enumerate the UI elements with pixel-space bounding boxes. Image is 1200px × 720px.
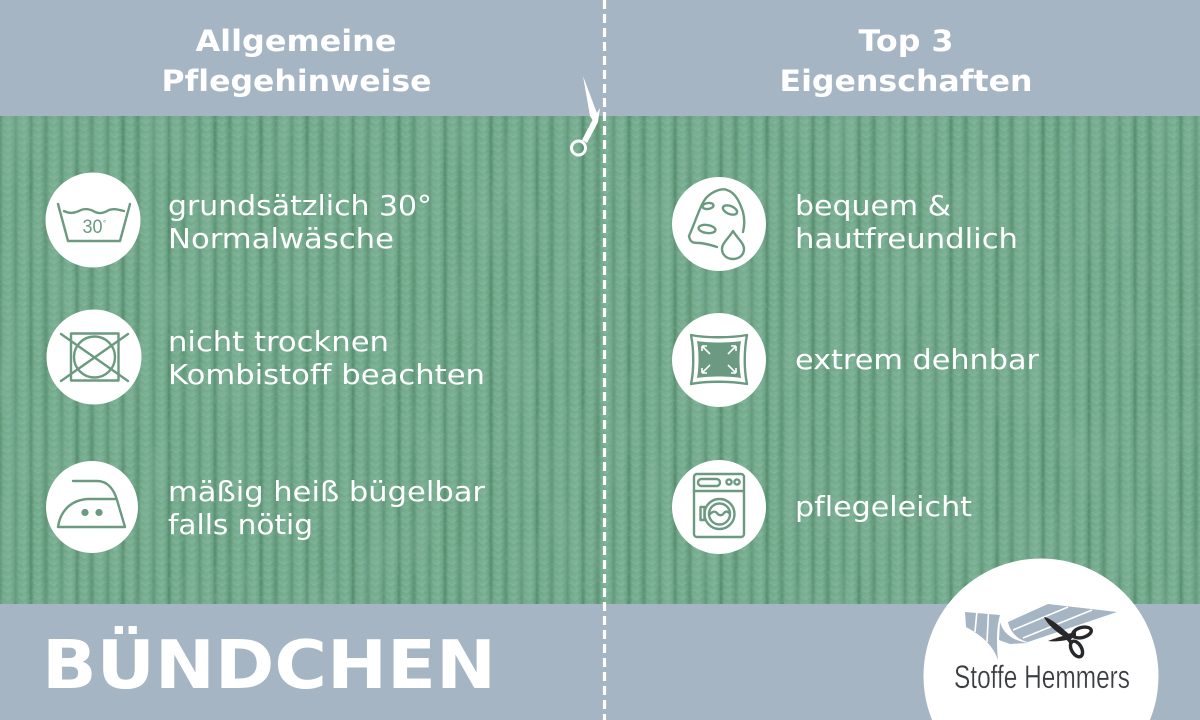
- text: ironing instructions: mäßig heiß bügelbar: [168, 475, 486, 508]
- text: wash instructions: Normalwäsche: [168, 222, 394, 255]
- top header band: [0, 0, 1200, 116]
- icon: wash 30 degrees: °: [103, 219, 106, 228]
- title: Bündchen: BÜNDCHEN: [42, 625, 496, 704]
- text: easy care: pflegeleicht: [795, 490, 972, 523]
- text: comfortable: [795, 189, 1018, 255]
- icon: scissors on cut line: [572, 76, 600, 155]
- text: wash instructions: [168, 189, 432, 255]
- panel: care instructions: [46, 172, 486, 553]
- icon: stretch square: [672, 313, 766, 407]
- heading: Top 3 Eigenschaften: Eigenschaften: [780, 64, 1032, 98]
- heading: Allgemeine Pflegehinweise: Pflegehinweise: [162, 64, 432, 98]
- heading: Top 3 Eigenschaften: Top 3: [858, 24, 954, 58]
- text: ironing instructions: [168, 475, 486, 541]
- panel: top 3 properties: [672, 177, 1040, 554]
- icon: do not tumble dry: [46, 310, 142, 404]
- icon: wash 30 degrees: 30: [82, 217, 102, 238]
- logo wordmark: Stoffe Hemmers: [954, 659, 1130, 695]
- icon: iron medium heat: [46, 461, 138, 553]
- text: drying instructions: [168, 325, 485, 391]
- dashed cut line: [603, 0, 606, 720]
- logo: Stoffe Hemmers: [923, 558, 1158, 720]
- text: drying instructions: Kombistoff beachten: [168, 358, 485, 391]
- heading: Allgemeine Pflegehinweise: [162, 24, 432, 98]
- logo scissors: [1044, 617, 1092, 659]
- icon: face mask and drop: [672, 177, 766, 271]
- text: ironing instructions: falls nötig: [168, 508, 313, 541]
- logo fabric: [965, 604, 1117, 660]
- text: comfortable: hautfreundlich: [795, 222, 1018, 255]
- heading: Allgemeine Pflegehinweise: Allgemeine: [196, 24, 396, 58]
- text: stretchable: extrem dehnbar: [795, 343, 1040, 376]
- icon: wash 30 degrees: [46, 172, 140, 268]
- bottom band: [0, 604, 1200, 720]
- text: drying instructions: nicht trocknen: [168, 325, 389, 358]
- text: wash instructions: grundsätzlich 30°: [168, 189, 432, 222]
- fabric background: [0, 116, 1200, 604]
- icon: washing machine: [672, 460, 766, 554]
- heading: Top 3 Eigenschaften: [780, 24, 1032, 98]
- text: comfortable: bequem &: [795, 189, 951, 222]
